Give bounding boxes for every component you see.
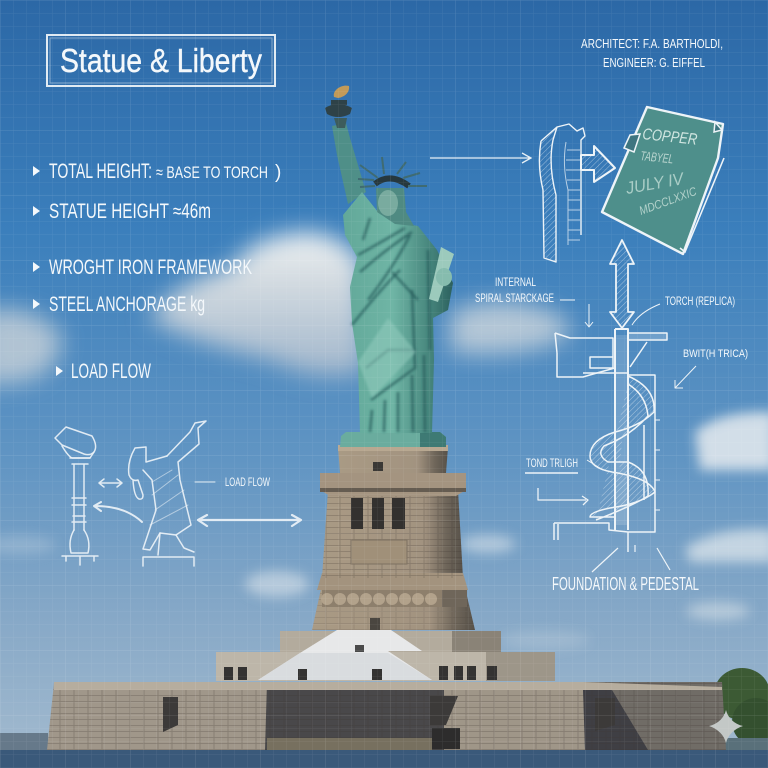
torch column sketch (55, 427, 98, 565)
tablet (429, 247, 454, 302)
fact: total height: ) (275, 162, 281, 183)
fact: framework: WROGHT IRON FRAMEWORK (49, 256, 252, 279)
replica label: BWIT(H TRICA) (683, 348, 748, 360)
windows (351, 498, 405, 529)
fact: load flow (56, 360, 151, 383)
internal spiral label: SPIRAL STARCKAGE (475, 291, 554, 305)
pointer arrow to section (430, 153, 531, 163)
tablet inscription: COPPER (642, 126, 698, 149)
foundation (554, 523, 655, 552)
credits: ARCHITECT: F.A. BARTHOLDI, (581, 36, 723, 51)
title: Statue & Liberty (60, 42, 262, 79)
leader lines (560, 300, 696, 470)
balcony (320, 473, 466, 496)
distant shoreline (0, 733, 48, 750)
head (376, 188, 414, 226)
internal spiral label (475, 275, 554, 305)
small stair label: TOND TRLIGH (526, 456, 578, 470)
fact: total height: ≈ BASE TO TORCH (156, 163, 268, 182)
load flow label: LOAD FLOW (225, 475, 270, 489)
spiral band (590, 376, 655, 520)
statue plinth (340, 432, 446, 447)
lower shaft panel (351, 540, 407, 564)
double arrow (610, 240, 634, 328)
tree (714, 668, 768, 750)
credits: ENGINEER: G. EIFFEL (603, 55, 705, 70)
small stair label (525, 456, 578, 473)
tablet inscription: JULY IV (623, 169, 686, 198)
pedestal (312, 445, 475, 630)
column section sketch (539, 124, 615, 262)
tablet inscription (623, 126, 699, 218)
spiral stair section (538, 300, 696, 572)
fact: total height (33, 160, 281, 183)
top block (338, 447, 448, 473)
upper platform (627, 333, 667, 340)
tablet inscription: TABYEL (640, 148, 674, 166)
crown (358, 157, 427, 187)
shaft (322, 490, 463, 578)
robe folds (352, 218, 430, 432)
statue figure sketch (129, 421, 206, 566)
clouds (0, 232, 768, 649)
outer wall (628, 375, 655, 525)
torch (325, 86, 352, 128)
tablet inscription: MDCCLXXIC (637, 184, 699, 218)
internal spiral label: INTERNAL (495, 275, 536, 289)
robe (343, 192, 453, 433)
load flow sketch (55, 421, 301, 566)
white pavilion (258, 630, 432, 680)
fact: framework (33, 256, 252, 279)
pedestal base block (312, 575, 475, 630)
fort walls (47, 682, 726, 750)
water (0, 750, 768, 768)
fact: statue height (33, 200, 211, 223)
credits (581, 36, 723, 70)
raised arm (332, 123, 366, 204)
sparkle mark (709, 710, 743, 743)
cushion band (321, 588, 467, 607)
torch label: TORCH (REPLICA) (665, 294, 735, 308)
terraces (216, 630, 555, 681)
title box (47, 35, 275, 86)
copper tablet (602, 107, 724, 254)
light drape (358, 318, 416, 398)
facts list (33, 160, 281, 383)
fact: anchorage (33, 293, 205, 316)
load arrows (94, 479, 301, 526)
core column (615, 329, 628, 530)
block arrow (581, 146, 615, 182)
fact: load flow: LOAD FLOW (71, 360, 151, 383)
fact: total height: TOTAL HEIGHT: (49, 160, 152, 183)
fact: anchorage: STEEL ANCHORAGE kg (49, 293, 205, 316)
fact: statue height: STATUE HEIGHT ≈46m (49, 200, 211, 223)
statue (325, 86, 454, 447)
